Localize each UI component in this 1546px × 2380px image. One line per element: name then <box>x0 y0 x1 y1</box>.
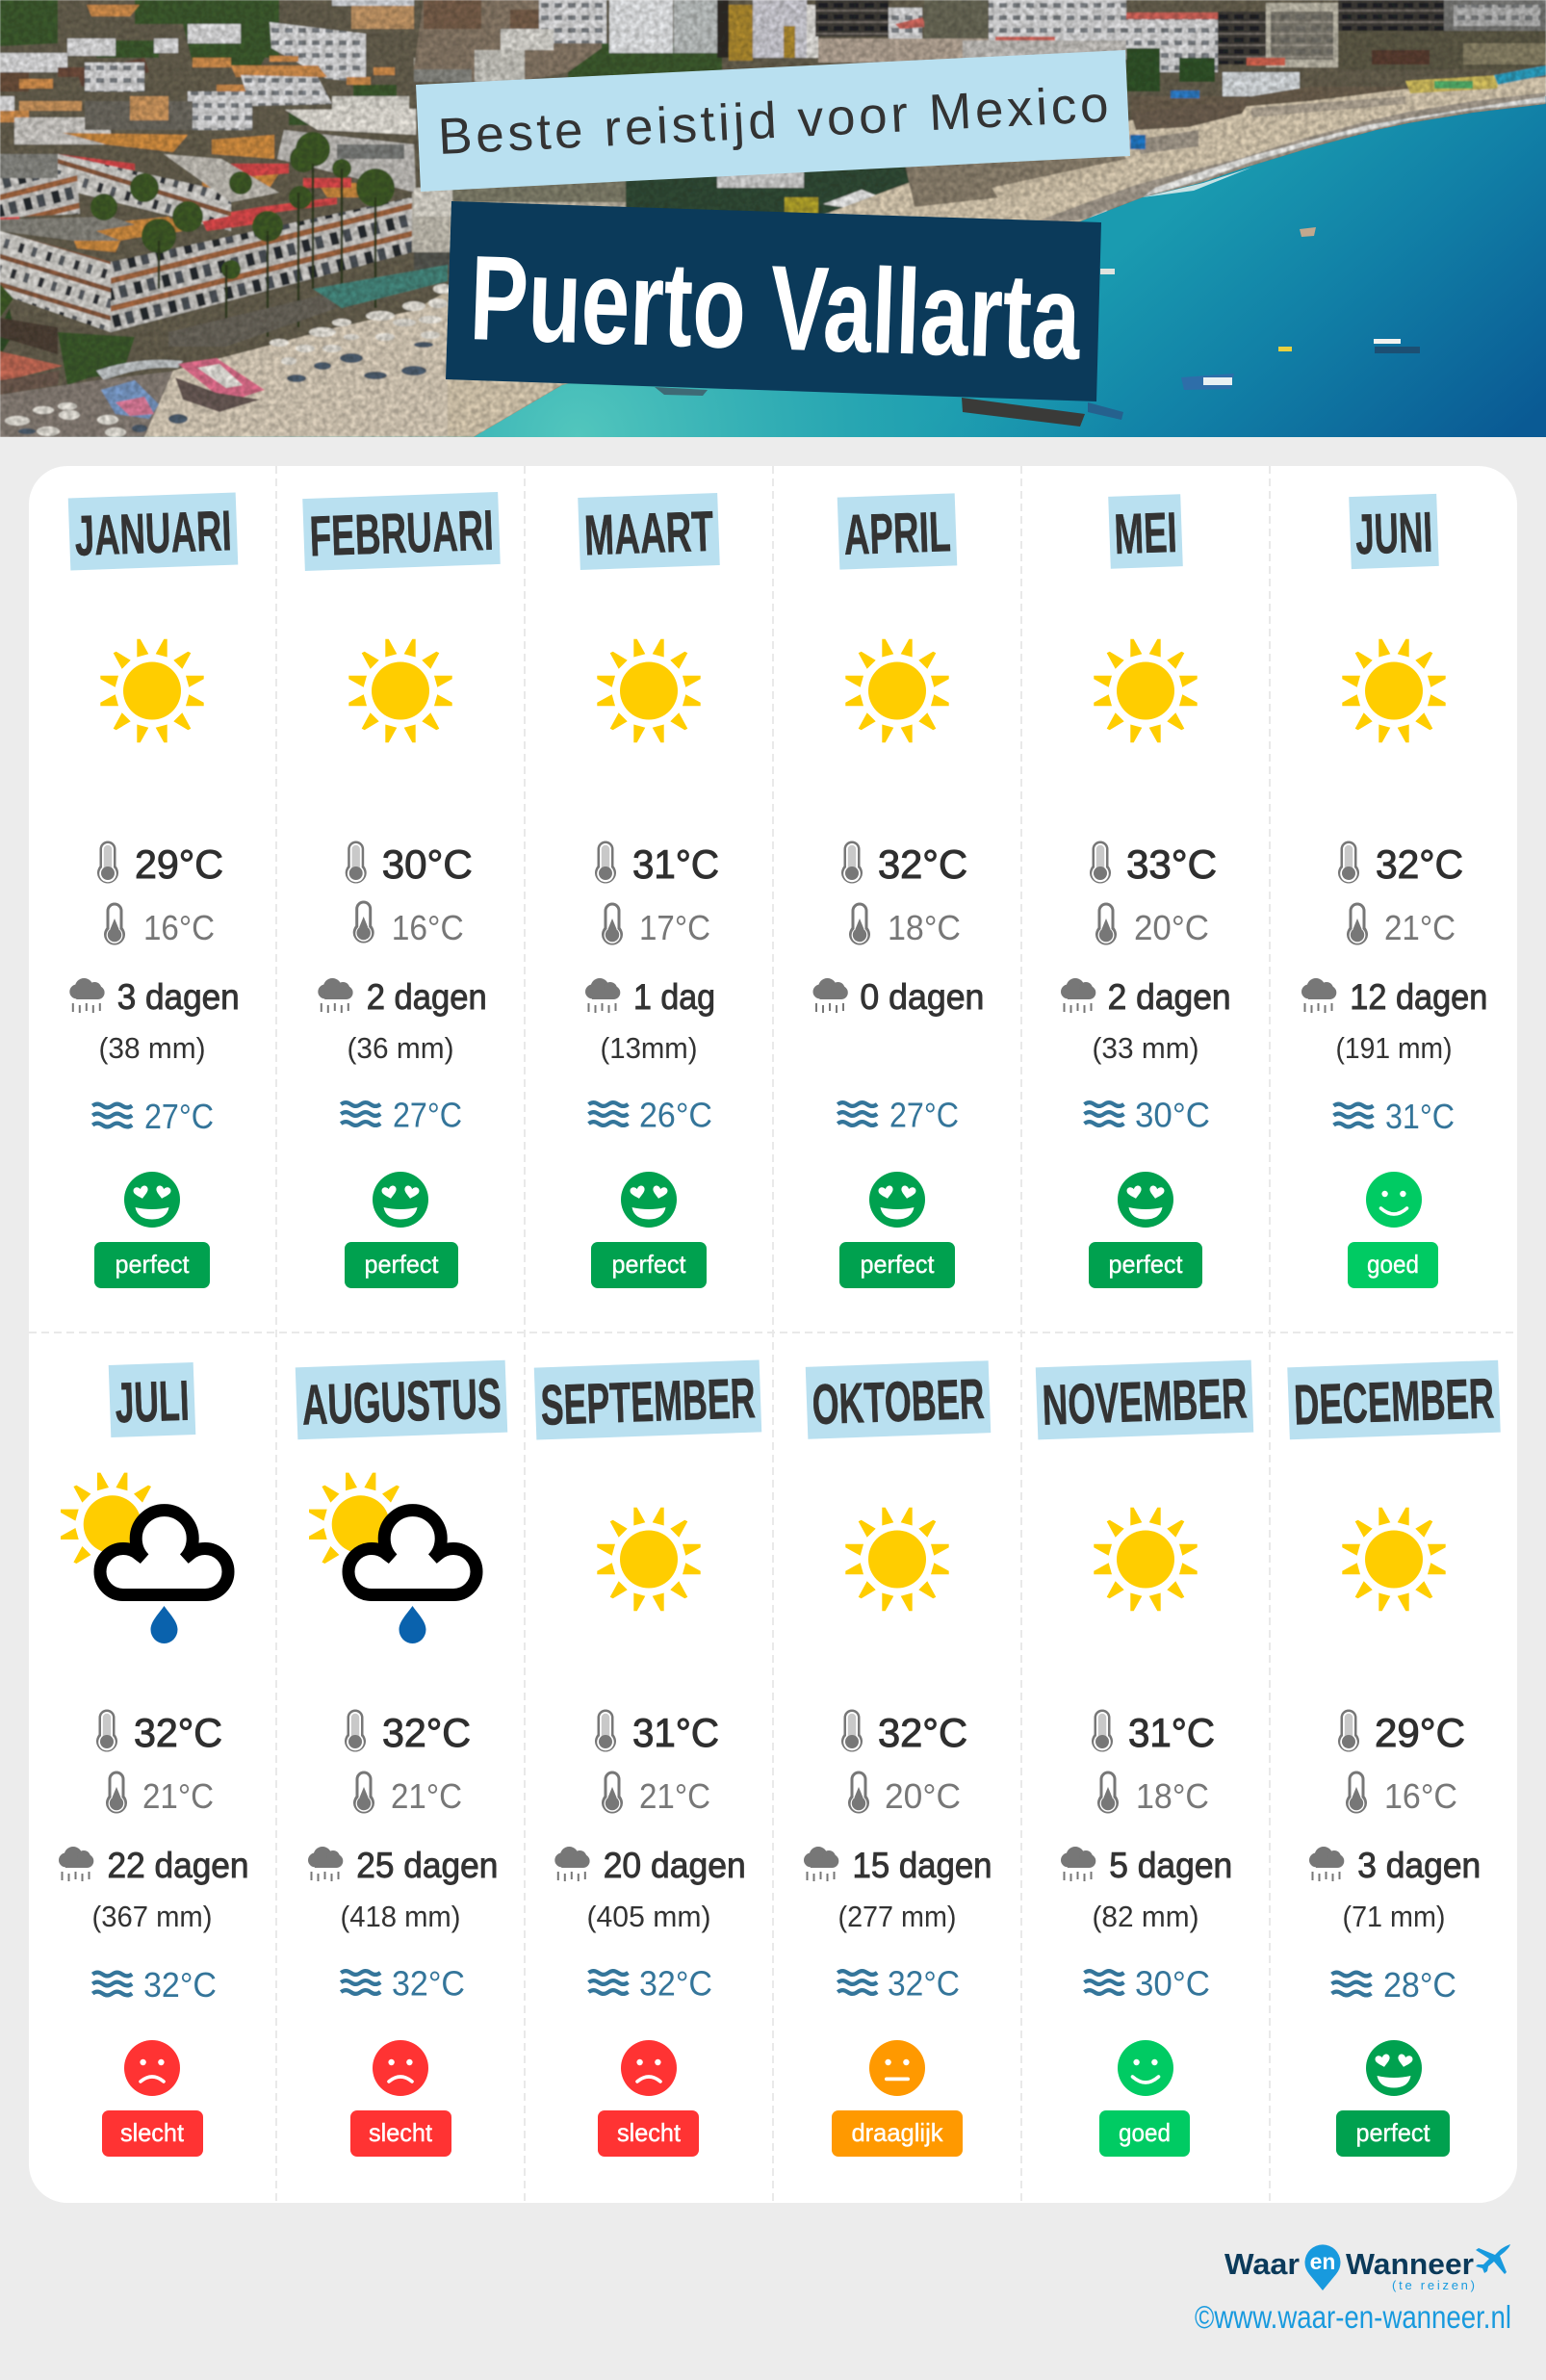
foliage <box>0 0 722 125</box>
sea temperature: 26°C <box>639 1096 712 1134</box>
logo: Waar en Wanneer: Waar <box>1224 2247 1300 2281</box>
month: oktober <box>806 1360 991 1439</box>
icon: sun, cloud and rain <box>309 1473 477 1643</box>
rating badge <box>591 1242 707 1288</box>
min temperature: 20°C <box>1134 908 1209 947</box>
rating badge: perfect <box>861 1250 935 1279</box>
min temperature: 21°C <box>1384 908 1456 947</box>
rating badge: perfect <box>1355 2118 1430 2147</box>
surf <box>1143 96 1546 197</box>
upper hotel wing <box>58 154 231 231</box>
icon: rain cloud <box>318 978 353 1013</box>
icon: rain cloud <box>1061 1847 1095 1881</box>
icon: min thermometer <box>602 1772 623 1813</box>
rating badge: perfect <box>364 1250 439 1279</box>
sea temperature: 27°C <box>889 1096 959 1134</box>
icon: rain cloud <box>1301 978 1336 1013</box>
min temperature: 17°C <box>639 908 710 947</box>
rain days: 2 dagen <box>1108 977 1231 1017</box>
max temperature: 32°C <box>878 841 967 887</box>
rainfall: (38 mm) <box>98 1031 206 1065</box>
panel: maart <box>578 493 720 1288</box>
orange and red roofs <box>64 132 360 239</box>
middle strip below subtitle <box>414 188 452 217</box>
rainfall: (13mm) <box>601 1031 697 1065</box>
icon: waves <box>92 1973 132 1995</box>
rain days: 2 dagen <box>367 977 487 1017</box>
rainfall: (191 mm) <box>1336 1031 1452 1065</box>
sea temperature: 32°C <box>888 1964 960 2003</box>
panel: augustus <box>296 1360 507 2157</box>
banner: subtitle <box>416 50 1130 192</box>
icon: waves <box>92 1104 132 1126</box>
top centre buildings <box>414 0 602 82</box>
white houses upper left <box>270 22 366 82</box>
icon: sun, cloud and rain <box>61 1473 228 1643</box>
icon: sun <box>1094 1508 1198 1611</box>
icon: waves <box>1084 1102 1124 1125</box>
max temperature: 30°C <box>382 841 473 887</box>
panel: januari <box>68 492 240 1288</box>
icon: sun <box>597 639 701 742</box>
icon: min thermometer <box>104 903 125 944</box>
logo: Waar en Wanneer: (te reizen) <box>1392 2278 1475 2292</box>
panel: climate table <box>29 466 1517 2203</box>
rating badge: goed <box>1119 2118 1171 2147</box>
sea temperature: 32°C <box>639 1964 712 2003</box>
icon: min thermometer <box>602 903 623 944</box>
rating badge <box>1336 2110 1450 2157</box>
rainfall: (71 mm) <box>1342 1900 1446 1933</box>
month: mei <box>1108 494 1183 569</box>
icon: rain cloud <box>585 978 620 1013</box>
rain days: 3 dagen <box>117 977 240 1017</box>
month: mei: MEI <box>1113 501 1178 566</box>
rating badge <box>102 2110 203 2157</box>
icon: max thermometer <box>595 841 616 883</box>
icon: map pin: en <box>1310 2249 1335 2274</box>
month: juni <box>1349 494 1439 569</box>
icon: waves <box>837 1102 877 1125</box>
max temperature: 31°C <box>632 1710 719 1755</box>
icon: rain cloud <box>812 978 848 1013</box>
rating badge <box>839 1242 955 1288</box>
icon: smiley perfect <box>869 1172 925 1228</box>
palm trees <box>90 132 395 279</box>
max temperature: 31°C <box>1128 1710 1215 1755</box>
panel: juli <box>59 1362 248 2157</box>
rainfall: (277 mm) <box>837 1900 957 1933</box>
icon: min thermometer <box>106 1772 127 1813</box>
sea <box>39 96 1546 437</box>
icon: sun <box>845 639 949 742</box>
icon: smiley bad <box>373 2040 428 2096</box>
sea temperature: 28°C <box>1383 1965 1456 2005</box>
month: maart <box>578 493 720 570</box>
month: juni: JUNI <box>1354 501 1433 566</box>
month: april: APRIL <box>842 500 952 567</box>
panel: december <box>1287 1360 1501 2157</box>
icon: sun <box>597 1508 701 1611</box>
rain days: 22 dagen <box>108 1846 248 1885</box>
banner: title <box>446 201 1101 401</box>
month: februari: FEBRUARI <box>308 499 495 568</box>
icon: rain cloud <box>804 1847 838 1881</box>
icon: sun <box>845 1508 949 1611</box>
header photo: Puerto Vallarta coast <box>0 0 1546 437</box>
max temperature: 32°C <box>878 1710 967 1755</box>
icon: max thermometer <box>1338 841 1359 883</box>
max temperature: 32°C <box>382 1710 471 1755</box>
icon: max thermometer <box>841 1710 863 1751</box>
rating badge: draaglijk <box>851 2118 943 2147</box>
icon: smiley bad <box>621 2040 677 2096</box>
month: november: NOVEMBER <box>1041 1366 1249 1437</box>
rain days: 12 dagen <box>1350 977 1487 1017</box>
sea temperature: 27°C <box>144 1097 214 1136</box>
rating badge <box>832 2110 963 2157</box>
month: augustus: AUGUSTUS <box>300 1366 502 1437</box>
min temperature: 21°C <box>639 1776 710 1816</box>
month: januari <box>68 492 238 571</box>
panel: februari <box>302 492 501 1288</box>
banner: subtitle: Beste reistijd voor Mexico <box>437 76 1110 166</box>
min temperature: 21°C <box>142 1776 214 1816</box>
rain days: 0 dagen <box>860 977 984 1017</box>
icon: min thermometer <box>848 1772 869 1813</box>
banner: title: Puerto Vallarta <box>468 231 1083 385</box>
icon: waves <box>341 1102 380 1125</box>
month: juli <box>109 1362 195 1437</box>
icon: rain cloud <box>308 1847 343 1881</box>
icon: waves <box>1084 1971 1124 1994</box>
max temperature: 32°C <box>1376 841 1463 887</box>
icon: smiley good <box>1118 2040 1173 2096</box>
icon: max thermometer <box>841 841 863 883</box>
beach <box>424 76 1546 437</box>
min temperature: 18°C <box>888 908 961 947</box>
logo: Waar en Wanneer: Wanneer <box>1346 2247 1474 2281</box>
max temperature: 29°C <box>135 841 223 887</box>
icon: max thermometer <box>1338 1710 1359 1751</box>
month: september: SEPTEMBER <box>539 1366 757 1437</box>
min temperature: 16°C <box>1384 1776 1457 1816</box>
rain days: 20 dagen <box>604 1846 746 1885</box>
rainfall: (405 mm) <box>587 1900 710 1933</box>
month: augustus <box>296 1360 507 1439</box>
rating badge: perfect <box>612 1250 686 1279</box>
panel: oktober <box>804 1360 992 2157</box>
max temperature: 32°C <box>134 1710 222 1755</box>
rainfall: (33 mm) <box>1092 1031 1199 1065</box>
rainfall: (418 mm) <box>341 1900 460 1933</box>
panel: april <box>812 493 984 1288</box>
icon: smiley bad <box>124 2040 180 2096</box>
min temperature: 21°C <box>391 1776 462 1816</box>
rating badge <box>1089 1242 1202 1288</box>
rain days: 15 dagen <box>853 1846 992 1885</box>
rating badge <box>94 1242 210 1288</box>
icon: sun <box>1342 639 1446 742</box>
icon: min thermometer <box>1097 1772 1119 1813</box>
max temperature: 29°C <box>1375 1710 1465 1755</box>
boats and pier <box>655 227 1420 427</box>
sea temperature: 31°C <box>1385 1097 1455 1136</box>
icon: max thermometer <box>96 1710 117 1751</box>
icon: max thermometer <box>1092 1710 1113 1751</box>
logo: Waar en Wanneer <box>1224 2244 1510 2292</box>
icon: rain cloud <box>554 1847 590 1881</box>
rain days: 3 dagen <box>1357 1846 1481 1885</box>
rating badge: slecht <box>617 2118 682 2147</box>
icon: rain cloud <box>1061 978 1095 1013</box>
month: oktober: OKTOBER <box>811 1367 986 1436</box>
icon: waves <box>1332 1973 1371 1995</box>
rain days: 5 dagen <box>1109 1846 1232 1885</box>
icon: waves <box>837 1971 877 1994</box>
min temperature: 18°C <box>1136 1776 1209 1816</box>
min temperature: 16°C <box>143 908 215 947</box>
icon: airplane <box>1476 2244 1510 2274</box>
sea temperature: 32°C <box>143 1965 217 2005</box>
max temperature: 31°C <box>632 841 719 887</box>
month: september <box>534 1359 761 1440</box>
icon: rain cloud <box>59 1847 93 1881</box>
min temperature: 20°C <box>885 1776 961 1816</box>
icon: min thermometer <box>1346 1772 1367 1813</box>
icon: max thermometer <box>97 841 118 883</box>
max temperature: 33°C <box>1126 841 1217 887</box>
icon: smiley neutral <box>869 2040 925 2096</box>
icon: waves <box>589 1971 628 1994</box>
month: juli: JULI <box>114 1369 191 1435</box>
rating badge: goed <box>1367 1250 1419 1279</box>
icon: waves <box>589 1102 628 1125</box>
icon: smiley good <box>1366 1172 1422 1228</box>
right buildings <box>1126 14 1218 72</box>
rating badge <box>598 2110 699 2157</box>
main hotel <box>0 231 111 332</box>
icon: waves <box>341 1971 380 1994</box>
rainfall: (82 mm) <box>1092 1900 1199 1933</box>
icon: max thermometer <box>345 1710 366 1751</box>
rating badge <box>1099 2110 1190 2157</box>
icon: sun <box>100 639 204 742</box>
icon: smiley perfect <box>373 1172 428 1228</box>
rating badge <box>1348 1242 1438 1288</box>
rating badge: slecht <box>120 2118 185 2147</box>
icon: min thermometer <box>849 903 870 944</box>
sea temperature: 32°C <box>392 1964 465 2003</box>
panel: september <box>534 1359 761 2157</box>
icon: rain cloud <box>1309 1847 1344 1881</box>
pool roof and thatch <box>168 294 337 347</box>
icon: max thermometer <box>346 841 367 883</box>
rain days: 1 dag <box>633 977 715 1017</box>
icon: smiley perfect <box>124 1172 180 1228</box>
min temperature: 16°C <box>392 908 464 947</box>
rainfall: (367 mm) <box>92 1900 212 1933</box>
rating badge <box>345 1242 458 1288</box>
icon: smiley perfect <box>1366 2040 1422 2096</box>
rating badge: perfect <box>1109 1250 1183 1279</box>
icon: map pin <box>1305 2244 1340 2290</box>
month: maart: MAART <box>583 500 714 567</box>
sea temperature: 30°C <box>1135 1964 1210 2003</box>
panel: november <box>1036 1360 1253 2157</box>
icon: max thermometer <box>595 1710 616 1751</box>
grey building by banner <box>411 192 451 253</box>
sea temperature: 30°C <box>1135 1096 1210 1134</box>
icon: rain cloud <box>69 978 105 1013</box>
rain days: 25 dagen <box>356 1846 498 1885</box>
icon: max thermometer <box>1090 841 1111 883</box>
icon: min thermometer <box>1095 903 1117 944</box>
icon: smiley perfect <box>621 1172 677 1228</box>
icon: min thermometer <box>1347 903 1368 944</box>
icon: sun <box>1094 639 1198 742</box>
icon: min thermometer <box>353 901 374 943</box>
month: januari: JANUARI <box>73 499 233 568</box>
rating badge: slecht <box>369 2118 433 2147</box>
panel: mei <box>1061 494 1231 1288</box>
icon: min thermometer <box>353 1772 374 1813</box>
month: februari <box>302 492 501 571</box>
rating badge: perfect <box>116 1250 190 1279</box>
panel: juni <box>1301 494 1487 1288</box>
icon: waves <box>1334 1104 1373 1126</box>
sea temperature: 27°C <box>393 1096 462 1134</box>
month: november <box>1036 1360 1253 1439</box>
icon: sun <box>1342 1508 1446 1611</box>
icon: sun <box>348 639 452 742</box>
icon: smiley perfect <box>1118 1172 1173 1228</box>
rainfall: (36 mm) <box>347 1031 454 1065</box>
month: april <box>837 493 957 570</box>
rating badge <box>350 2110 451 2157</box>
